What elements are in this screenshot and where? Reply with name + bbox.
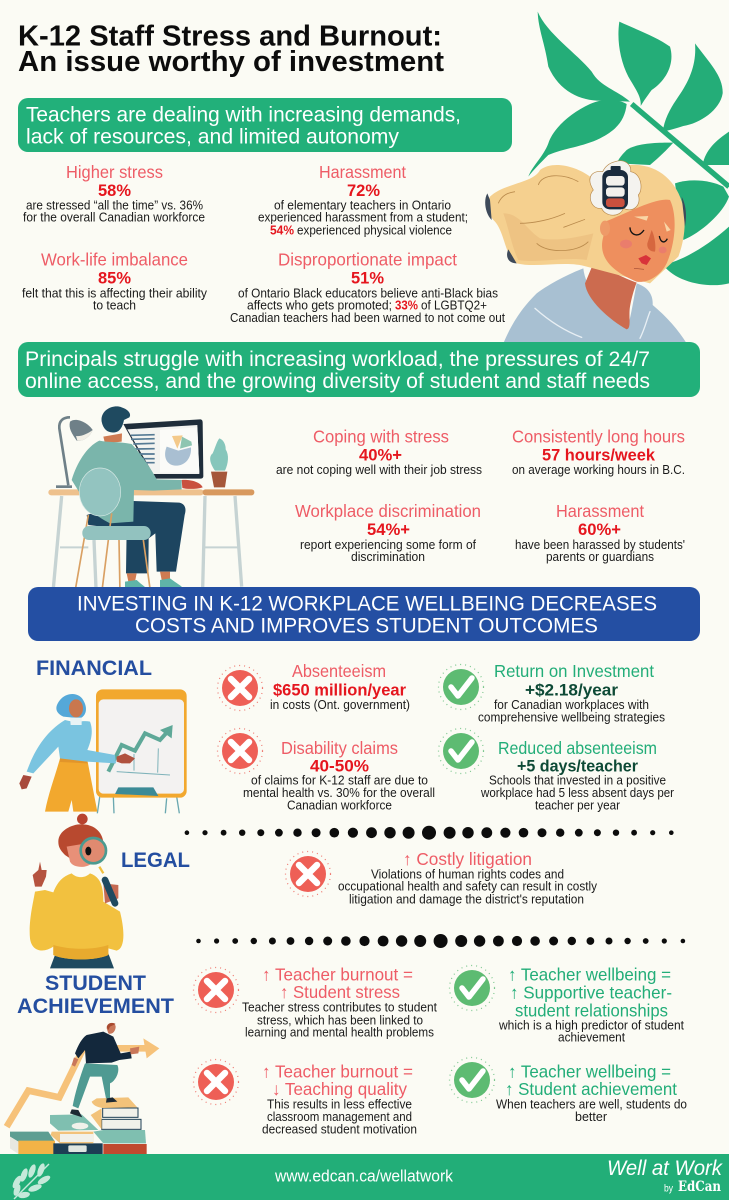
stat: burnout and teaching quality: ↓ Teaching quality <box>272 1079 407 1099</box>
icon: check <box>450 1058 494 1102</box>
stat: disproportionate impact: of Ontario Black educators believe anti-Black bias <box>238 286 498 300</box>
icon: cross <box>194 1060 238 1104</box>
stat: higher stress: 58% <box>98 181 131 200</box>
stat: harassment (principals): have been harassed by students' <box>515 538 685 552</box>
stat: harassment (teachers): 72% <box>347 181 380 200</box>
icon: cross <box>218 728 262 774</box>
banner: investing: COSTS AND IMPROVES STUDENT OUTCOMES <box>135 614 598 638</box>
stat: work-life imbalance: 85% <box>98 268 131 288</box>
stat: burnout and stress: stress, which has been linked to <box>257 1013 423 1027</box>
stat: wellbeing and relationships: ↑ Supportive teacher- <box>510 983 672 1003</box>
stat: return on investment: comprehensive wellbeing strategies <box>478 711 665 725</box>
stat: wellbeing and relationships <box>498 965 684 1045</box>
stat: reduced absenteeism <box>480 738 674 813</box>
stat: disability claims <box>243 738 435 813</box>
stat: consistently long hours: Consistently long hours <box>512 427 685 447</box>
stat: workplace discrimination: discrimination <box>351 550 425 564</box>
stat: harassment (principals): Harassment <box>556 501 644 521</box>
illustration: man climbing books <box>7 1023 159 1154</box>
stat: burnout and stress: learning and mental health problems <box>245 1026 434 1040</box>
stat: harassment (teachers): Harassment <box>319 162 406 182</box>
icon: cross <box>286 852 330 896</box>
stat: harassment (teachers) <box>258 162 468 238</box>
title: An issue worthy of investment <box>18 46 444 78</box>
illustration: woman with magnifying glass <box>30 814 123 968</box>
stat: higher stress: are stressed “all the time” vs. 36% <box>26 198 203 212</box>
stat: absenteeism: $650 million/year <box>273 681 406 700</box>
stat: work-life imbalance: felt that this is affecting their ability <box>22 286 208 300</box>
stat: coping with stress <box>276 427 482 477</box>
stat: work-life imbalance: Work-life imbalance <box>41 250 188 270</box>
banner: teachers: lack of resources, and limited autonomy <box>26 124 399 148</box>
stat: return on investment: +$2.18/year <box>525 681 618 700</box>
icon: check <box>438 728 484 774</box>
stat: harassment (teachers): of elementary teachers in Ontario <box>274 198 451 212</box>
stat: disability claims: Canadian workforce <box>287 799 392 813</box>
stat: workplace discrimination: Workplace discrimination <box>295 501 481 521</box>
footer url: www.edcan.ca/wellatwork <box>274 1166 453 1186</box>
illustration: woman presenting chart <box>19 689 187 813</box>
icon: check <box>438 664 484 710</box>
heading: student achievement: ACHIEVEMENT <box>17 995 174 1018</box>
stat: reduced absenteeism: +5 days/teacher <box>517 756 638 775</box>
stat: higher stress <box>23 162 205 225</box>
stat: burnout and stress <box>242 965 437 1040</box>
stat: costly litigation: litigation and damage the district's reputation <box>349 892 584 906</box>
stat: wellbeing and achievement: ↑ Teacher wellbeing = <box>508 1061 671 1081</box>
heading: student achievement <box>17 972 174 1018</box>
stat: disability claims: Disability claims <box>281 738 398 758</box>
stat: wellbeing and achievement <box>496 1061 687 1124</box>
stat: work-life imbalance: to teach <box>93 299 136 313</box>
stat: reduced absenteeism: Schools that invested in a positive <box>489 773 666 787</box>
stat: burnout and stress: Teacher stress contributes to student <box>242 1001 437 1015</box>
stat: disability claims: of claims for K-12 staff are due to <box>251 773 428 787</box>
title: K-12 Staff Stress and Burnout: <box>18 20 442 52</box>
heading: financial: FINANCIAL <box>36 657 152 680</box>
footer <box>0 1154 729 1200</box>
stat: harassment (principals) <box>515 501 685 564</box>
stat: consistently long hours: on average working hours in B.C. <box>512 463 685 477</box>
stat: disproportionate impact: 33% <box>395 299 418 313</box>
icon: cross <box>194 968 238 1012</box>
logo: well at work by edcan <box>607 1157 723 1195</box>
stat: costly litigation: Violations of human rights codes and <box>371 867 564 881</box>
stat: reduced absenteeism: Reduced absenteeism <box>498 738 657 758</box>
stat: return on investment: Return on Investment <box>494 661 654 681</box>
stat: coping with stress: Coping with stress <box>313 427 449 447</box>
heading: student achievement: STUDENT <box>45 972 146 995</box>
stat: absenteeism: in costs (Ont. government) <box>270 698 410 712</box>
stat: disproportionate impact: Disproportionate impact <box>278 250 457 270</box>
stat: wellbeing and achievement: better <box>575 1110 607 1124</box>
banner: teachers <box>18 98 512 152</box>
title <box>18 20 444 78</box>
stat: workplace discrimination: 54%+ <box>367 520 410 539</box>
stat: harassment (principals): parents or guardians <box>546 550 654 564</box>
stat: wellbeing and achievement: When teachers are well, students do <box>496 1097 687 1111</box>
stat: harassment (teachers): 54% <box>270 224 294 238</box>
stat: disability claims: mental health vs. 30% for the overall <box>243 786 435 800</box>
icon: cross <box>218 666 262 710</box>
banner: investing: INVESTING IN K-12 WORKPLACE WELLBEING DECREASES <box>77 592 657 616</box>
stat: absenteeism <box>270 661 410 712</box>
stat: harassment (teachers): experienced harassment from a student; <box>258 211 468 225</box>
stat: return on investment: for Canadian workplaces with <box>494 698 649 712</box>
stat: costly litigation: occupational health and safety can result in costly <box>338 880 598 894</box>
banner: teachers: Teachers are dealing with increasing demands, <box>26 102 461 126</box>
stat: costly litigation <box>338 849 598 906</box>
banner: principals: Principals struggle with increasing workload, the pressures of 24/7 <box>25 347 650 371</box>
stat: consistently long hours: 57 hours/week <box>542 446 656 465</box>
stat: disproportionate impact: Canadian teachers had been warned to not come out <box>230 311 505 325</box>
logo: well at work by edcan: EdCan <box>678 1179 721 1195</box>
stat: disproportionate impact <box>230 250 505 325</box>
stat: return on investment <box>478 661 665 725</box>
stat: coping with stress: are not coping well with their job stress <box>276 463 482 477</box>
stat: work-life imbalance <box>22 250 208 313</box>
stat: coping with stress: 40%+ <box>359 446 402 465</box>
banner: principals: online access, and the growing diversity of student and staff needs <box>25 369 650 393</box>
stat: wellbeing and relationships: which is a high predictor of student <box>498 1018 684 1032</box>
stat: higher stress: Higher stress <box>66 162 163 182</box>
stat: workplace discrimination <box>295 501 481 564</box>
stat: burnout and teaching quality: classroom management and <box>267 1110 412 1124</box>
logo: well at work by edcan: Well at Work <box>607 1157 723 1180</box>
stat: disproportionate impact: 51% <box>351 268 384 288</box>
icon: footer leaf branch <box>11 1162 52 1199</box>
stat: costly litigation: ↑ Costly litigation <box>403 849 532 869</box>
stat: harassment (principals): 60%+ <box>578 520 621 539</box>
icon: check <box>450 966 494 1010</box>
stat: wellbeing and relationships: student relationships <box>515 1001 668 1021</box>
illustration: principal at desk <box>48 406 254 593</box>
stat: workplace discrimination: report experiencing some form of <box>300 538 476 552</box>
heading: legal: LEGAL <box>121 849 190 872</box>
stat: burnout and teaching quality: ↑ Teacher burnout = <box>262 1061 413 1081</box>
stat: disproportionate impact: affects who gets promoted; <box>247 299 392 313</box>
stat: wellbeing and achievement: ↑ Student achievement <box>505 1079 677 1099</box>
stat: wellbeing and relationships: ↑ Teacher wellbeing = <box>508 965 671 985</box>
stat: disproportionate impact: of LGBTQ2+ <box>421 299 487 313</box>
stat: burnout and teaching quality: This results in less effective <box>267 1097 412 1111</box>
stat: burnout and teaching quality: decreased student motivation <box>262 1122 417 1136</box>
stat: harassment (teachers): experienced physical violence <box>297 224 452 238</box>
stat: consistently long hours <box>512 427 685 477</box>
stat: burnout and stress: ↑ Student stress <box>280 982 400 1002</box>
stat: reduced absenteeism: workplace had 5 less absent days per <box>480 786 674 800</box>
stat: burnout and stress: ↑ Teacher burnout = <box>262 965 413 985</box>
illustration: woman with low battery and leaves <box>485 12 729 343</box>
stat: wellbeing and relationships: achievement <box>558 1031 625 1045</box>
banner: investing <box>28 587 700 641</box>
logo: well at work by edcan: by <box>664 1184 673 1194</box>
stat: reduced absenteeism: teacher per year <box>535 799 620 813</box>
stat: higher stress: for the overall Canadian workforce <box>23 211 205 225</box>
banner: principals <box>18 342 700 397</box>
stat: absenteeism: Absenteeism <box>292 661 386 681</box>
stat: disability claims: 40-50% <box>310 756 369 775</box>
stat: burnout and teaching quality <box>262 1061 417 1136</box>
